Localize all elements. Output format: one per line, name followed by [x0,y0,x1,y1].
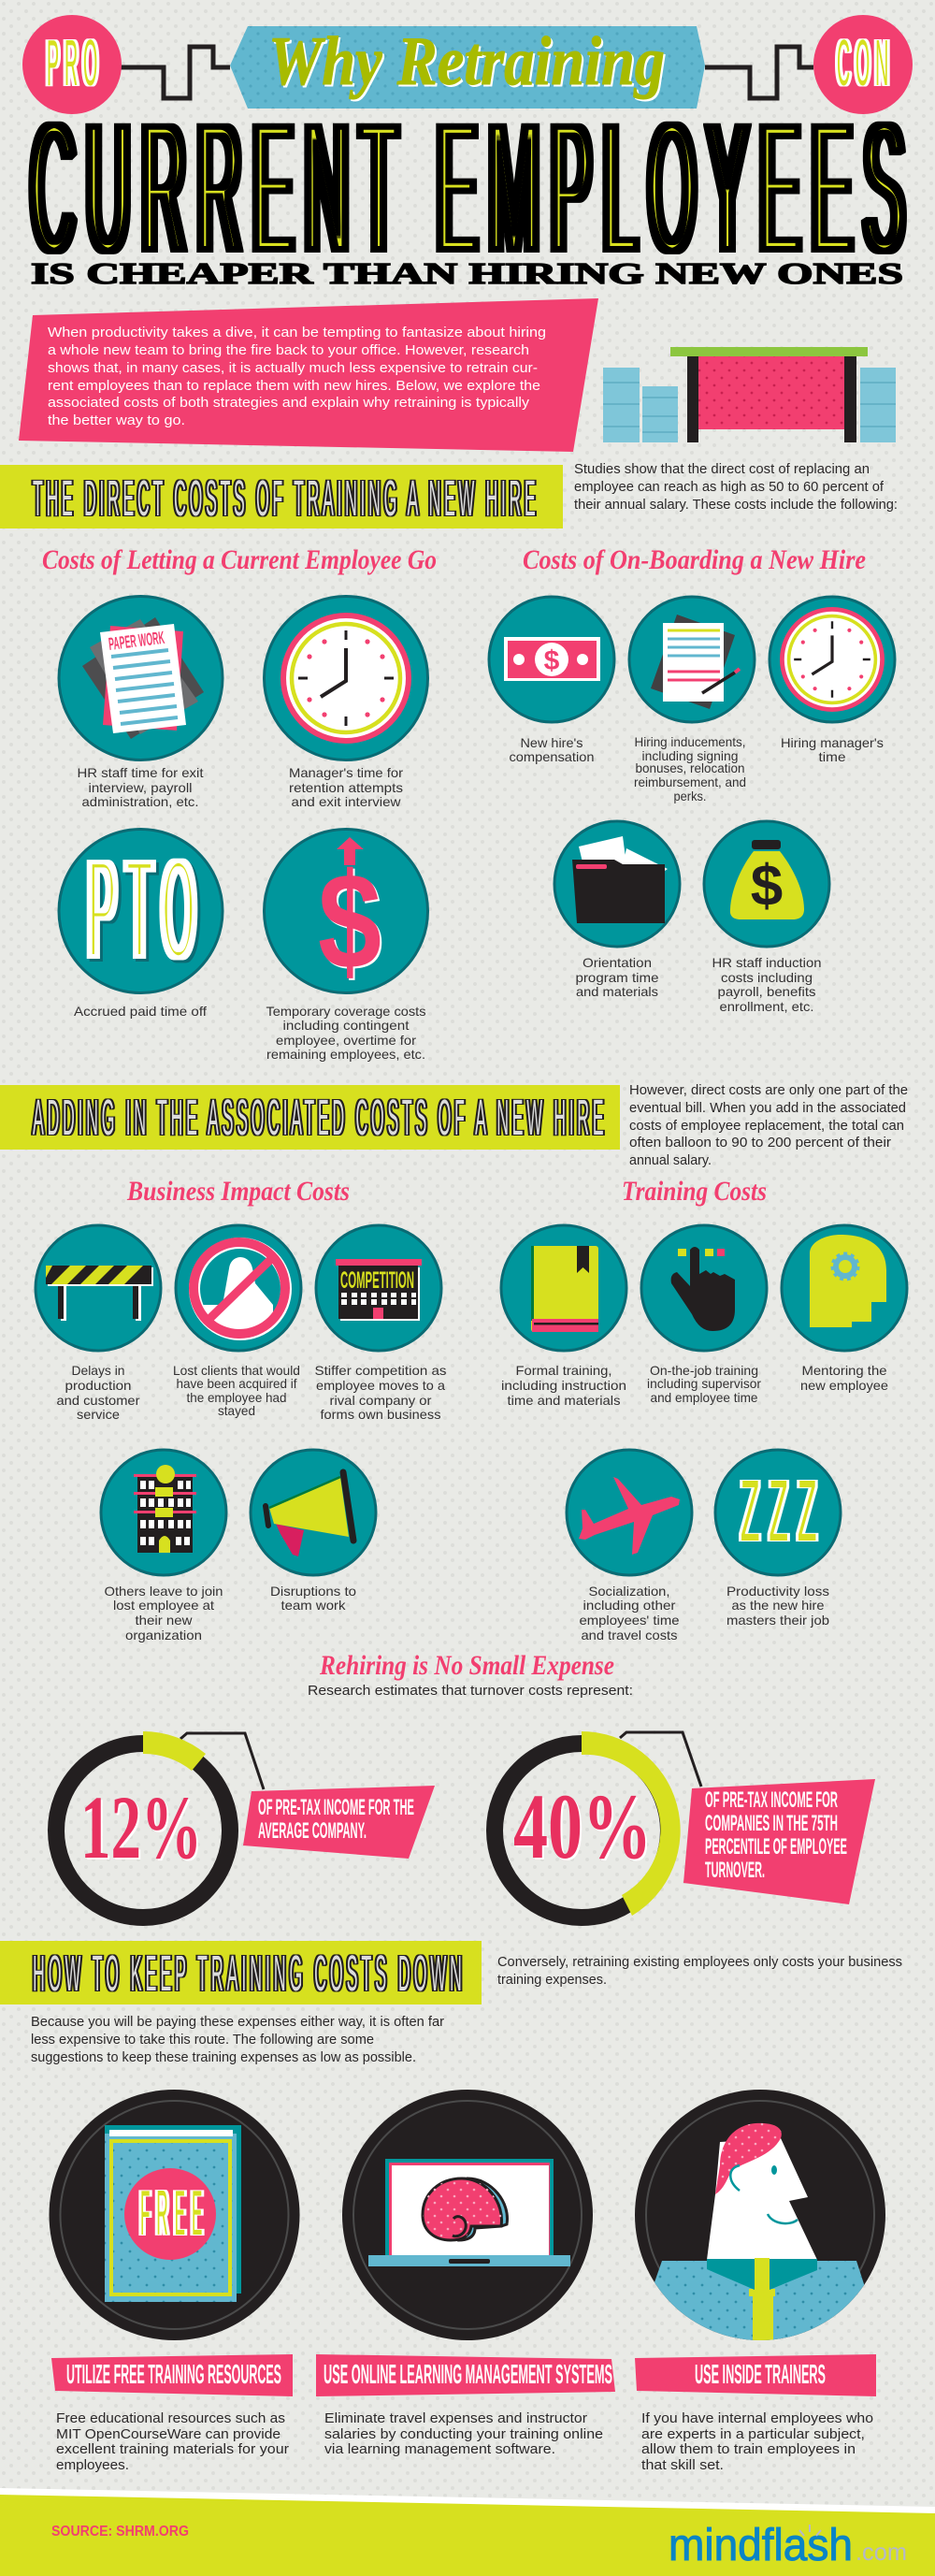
callout: 40 percent [683,1779,875,1904]
caption: rival company or [329,1393,432,1408]
text: associated costs intro: eventual bill. When you add in the associated [629,1100,906,1116]
caption: including instruction [501,1378,626,1393]
pro badge [22,15,122,114]
caption: perks. [673,789,707,803]
text: conversely: training expenses. [497,1972,607,1988]
icon: folder [554,821,680,947]
icon: trainer portrait [635,2090,885,2348]
panel: intro: shows that, in many cases, it is actually much less expensive to retrain cur- [48,360,538,376]
caption: new employee [800,1378,888,1393]
caption: and exit interview [292,794,401,809]
caption: team work [280,1598,347,1613]
section band: direct costs: THE DIRECT COSTS OF TRAINING A NEW HIRE [33,470,539,527]
source: SOURCE: SHRM.ORG [51,2524,189,2540]
caption [509,735,595,764]
caption: bonuses, relocation [636,760,744,775]
caption [800,1363,888,1393]
heading: rehiring: Rehiring is No Small Expense [319,1650,614,1681]
caption: the employee had [187,1390,286,1405]
icon: PTO [59,829,223,993]
caption [105,1584,223,1643]
icon: airplane [567,1450,692,1575]
icon: clock [264,597,428,760]
caption [77,765,204,809]
caption: remaining employees, etc. [266,1047,425,1062]
caption: Stiffer competition as [314,1363,447,1378]
caption: Others leave to join [105,1584,223,1599]
caption: retention attempts [289,780,403,795]
heading: business impact costs: Business Impact Costs [126,1176,350,1207]
icon: money: $ [544,645,560,676]
caption: reimbursement, and [634,774,746,789]
text: inside trainers: If you have internal employees who [641,2410,873,2426]
text: inside trainers: are experts in a particular subject, [641,2426,865,2442]
text: because: less expensive to take this route. The following are some [31,2032,374,2048]
caption: their new [135,1613,193,1628]
icon: desk and stacks [603,347,896,442]
text: online learning: via learning management software. [324,2441,555,2457]
caption: employee moves to a [316,1378,445,1393]
text: associated costs intro [629,1082,908,1168]
text: free resources: excellent training materials for your [56,2441,289,2457]
panel: intro: When productivity takes a dive, it can be tempting to fantasize about hiring [48,325,546,340]
caption: Productivity loss [726,1584,829,1599]
icon: competition building [316,1225,441,1351]
label: online learning [316,2354,615,2396]
icon: money [489,597,614,722]
caption [56,1363,140,1422]
caption [634,734,746,803]
caption: and materials [576,984,658,999]
heading: training costs: Training Costs [622,1176,767,1207]
caption: Formal training, [516,1363,611,1378]
blue banner [230,26,705,109]
icon: money bag [704,821,829,947]
caption: time and materials [507,1393,621,1408]
caption [501,1363,626,1408]
caption: New hire's [520,735,583,750]
subtitle: IS CHEAPER THAN HIRING NEW ONES [31,256,903,290]
caption [726,1584,829,1628]
caption: including other [583,1598,676,1613]
text: free resources: MIT OpenCourseWare can provide [56,2426,280,2442]
icon: small clock [770,597,895,722]
value: 12% [80,1777,202,1877]
text: free resources [56,2410,289,2473]
caption: Temporary coverage costs [266,1004,426,1019]
text: inside trainers [641,2410,873,2473]
caption [270,1584,356,1613]
leader line [620,1732,701,1787]
footer [0,2488,935,2576]
pro badge: PRO [47,25,103,99]
label: free resources [51,2354,293,2396]
caption: including supervisor [647,1376,761,1391]
connector lines [121,47,813,98]
chart: 40 percent ring [495,1731,701,1918]
icon: head with gear [782,1225,907,1351]
section band: keep costs down: HOW TO KEEP TRAINING COSTS DOWN [33,1946,466,2002]
logo: mindflash [669,2521,853,2570]
caption: production [65,1378,131,1393]
text: associated costs intro: annual salary. [629,1152,712,1168]
caption: organization [125,1628,202,1643]
text: online learning: Eliminate travel expenses and instructor [324,2410,587,2426]
icon: megaphone [251,1450,376,1575]
caption: On-the-job training [650,1363,758,1378]
caption [712,955,821,1014]
text: because: suggestions to keep these training expenses as low as possible. [31,2049,416,2065]
text: direct costs intro [574,461,898,513]
text: associated costs intro: often balloon to 90 to 200 percent of their [629,1135,891,1151]
text: direct costs intro: employee can reach as high as 50 to 60 percent of [574,479,885,495]
caption: including contingent [282,1018,410,1033]
caption: stayed [218,1403,255,1418]
icon: paper work: PAPER WORK [108,629,165,655]
icon: pointing hand [641,1225,767,1351]
caption: and employee time [651,1390,758,1405]
text: free resources: employees. [56,2457,129,2473]
icon: rising dollar: $ [318,845,381,997]
caption: Accrued paid time off [74,1004,207,1019]
panel: intro: a whole new team to bring the fire back to your office. However, research [48,342,529,358]
text: conversely: Conversely, retraining existing employees only costs your business [497,1954,902,1970]
icon: office tower [101,1450,226,1575]
icon: competition building: COMPETITION [340,1267,414,1294]
caption [266,1004,426,1062]
text: because [31,2014,444,2065]
caption: enrollment, etc. [720,999,813,1014]
caption: HR staff induction [712,955,821,970]
caption: HR staff time for exit [77,765,204,780]
text: free resources: Free educational resources such as [56,2410,285,2426]
caption: lost employee at [113,1598,214,1613]
caption: Orientation [583,955,652,970]
value: 40% [513,1774,652,1878]
icon: laptop brain [342,2090,593,2340]
text: inside trainers: allow them to train employees in [641,2441,856,2457]
text: research estimates: Research estimates that turnover costs represent: [308,1683,633,1699]
con badge [813,15,913,114]
icon: free book [49,2090,299,2340]
caption: including signing [641,748,739,763]
icon: free book: FREE [140,2177,209,2249]
icon: document and pencil [629,597,755,722]
caption: service [77,1407,120,1422]
caption [781,735,884,764]
banner script title: Why Retraining [268,23,665,100]
caption [314,1363,447,1422]
caption: masters their job [726,1613,829,1628]
caption: forms own business [320,1407,441,1422]
caption: interview, payroll [88,780,193,795]
section band: associated costs: ADDING IN THE ASSOCIATED COSTS OF A NEW HIRE [33,1090,607,1146]
panel: intro [19,298,598,452]
caption: compensation [509,749,595,764]
header: pro con banner [22,15,913,114]
callout: 40 percent: TURNOVER. [705,1858,765,1883]
caption: as the new hire [731,1598,825,1613]
panel: intro: the better way to go. [48,412,185,428]
text: direct costs intro: Studies show that the direct cost of replacing an [574,461,870,477]
caption [173,1363,300,1418]
caption [576,955,659,999]
con badge: CON [837,25,894,99]
icon: barrier [36,1225,161,1351]
callout: 12 percent: AVERAGE COMPANY. [258,1818,367,1844]
caption: payroll, benefits [718,984,815,999]
heading: costs of on-boarding: Costs of On-Boarding a New Hire [523,544,866,575]
caption: employee, overtime for [276,1033,416,1048]
caption [580,1584,680,1643]
panel: intro: rent employees than to replace them with new hires. Below, we explore the [48,378,540,394]
caption: costs including [721,970,813,985]
caption: time [819,749,846,764]
icon: zzz: ZZZ [741,1462,827,1559]
chart: 12 percent ring [56,1731,264,1918]
text: associated costs intro: costs of employee replacement, the total can [629,1118,904,1134]
caption: have been acquired if [176,1376,297,1391]
caption [289,765,403,809]
main title: CURRENT EMPLOYEES [31,86,916,292]
caption: Socialization, [589,1584,669,1599]
text: because: Because you will be paying these expenses either way, it is often far [31,2014,444,2030]
caption: Hiring inducements, [634,734,746,749]
caption: program time [576,970,659,985]
caption: Disruptions to [270,1584,356,1599]
callout: 12 percent: OF PRE-TAX INCOME FOR THE [258,1795,414,1820]
icon: book [501,1225,626,1351]
caption: employees' time [580,1613,680,1628]
leader line [180,1733,264,1789]
text: direct costs intro: their annual salary. These costs include the following: [574,497,898,513]
text: associated costs intro: However, direct costs are only one part of the [629,1082,908,1098]
caption: administration, etc. [82,794,198,809]
icon: PTO: PTO [88,830,206,989]
icon: money bag: $ [751,854,783,919]
caption: Lost clients that would [173,1363,300,1378]
text: UTILIZE FREE TRAINING RESOURCES [66,2360,281,2390]
caption: Manager's time for [289,765,403,780]
icon: rising dollar [264,829,428,997]
callout: 12 percent [243,1786,435,1859]
caption: and travel costs [582,1628,677,1643]
logo: .com [856,2538,907,2566]
text: inside trainers: that skill set. [641,2457,724,2473]
panel: intro: associated costs of both strategies and explain why retraining is typically [48,395,530,411]
caption: and customer [56,1393,140,1408]
icon: zzz [715,1450,841,1575]
caption: Mentoring the [802,1363,887,1378]
label: inside trainers [635,2354,876,2396]
caption: Delays in [71,1363,125,1378]
icon: paper work [59,597,223,760]
text: online learning [324,2410,603,2457]
heading: costs of letting go: Costs of Letting a Current Employee Go [42,544,437,575]
icon: no clients [176,1225,301,1351]
caption: Hiring manager's [781,735,884,750]
caption [647,1363,761,1405]
text: online learning: salaries by conducting your training online [324,2426,603,2442]
text: conversely [497,1954,902,1988]
